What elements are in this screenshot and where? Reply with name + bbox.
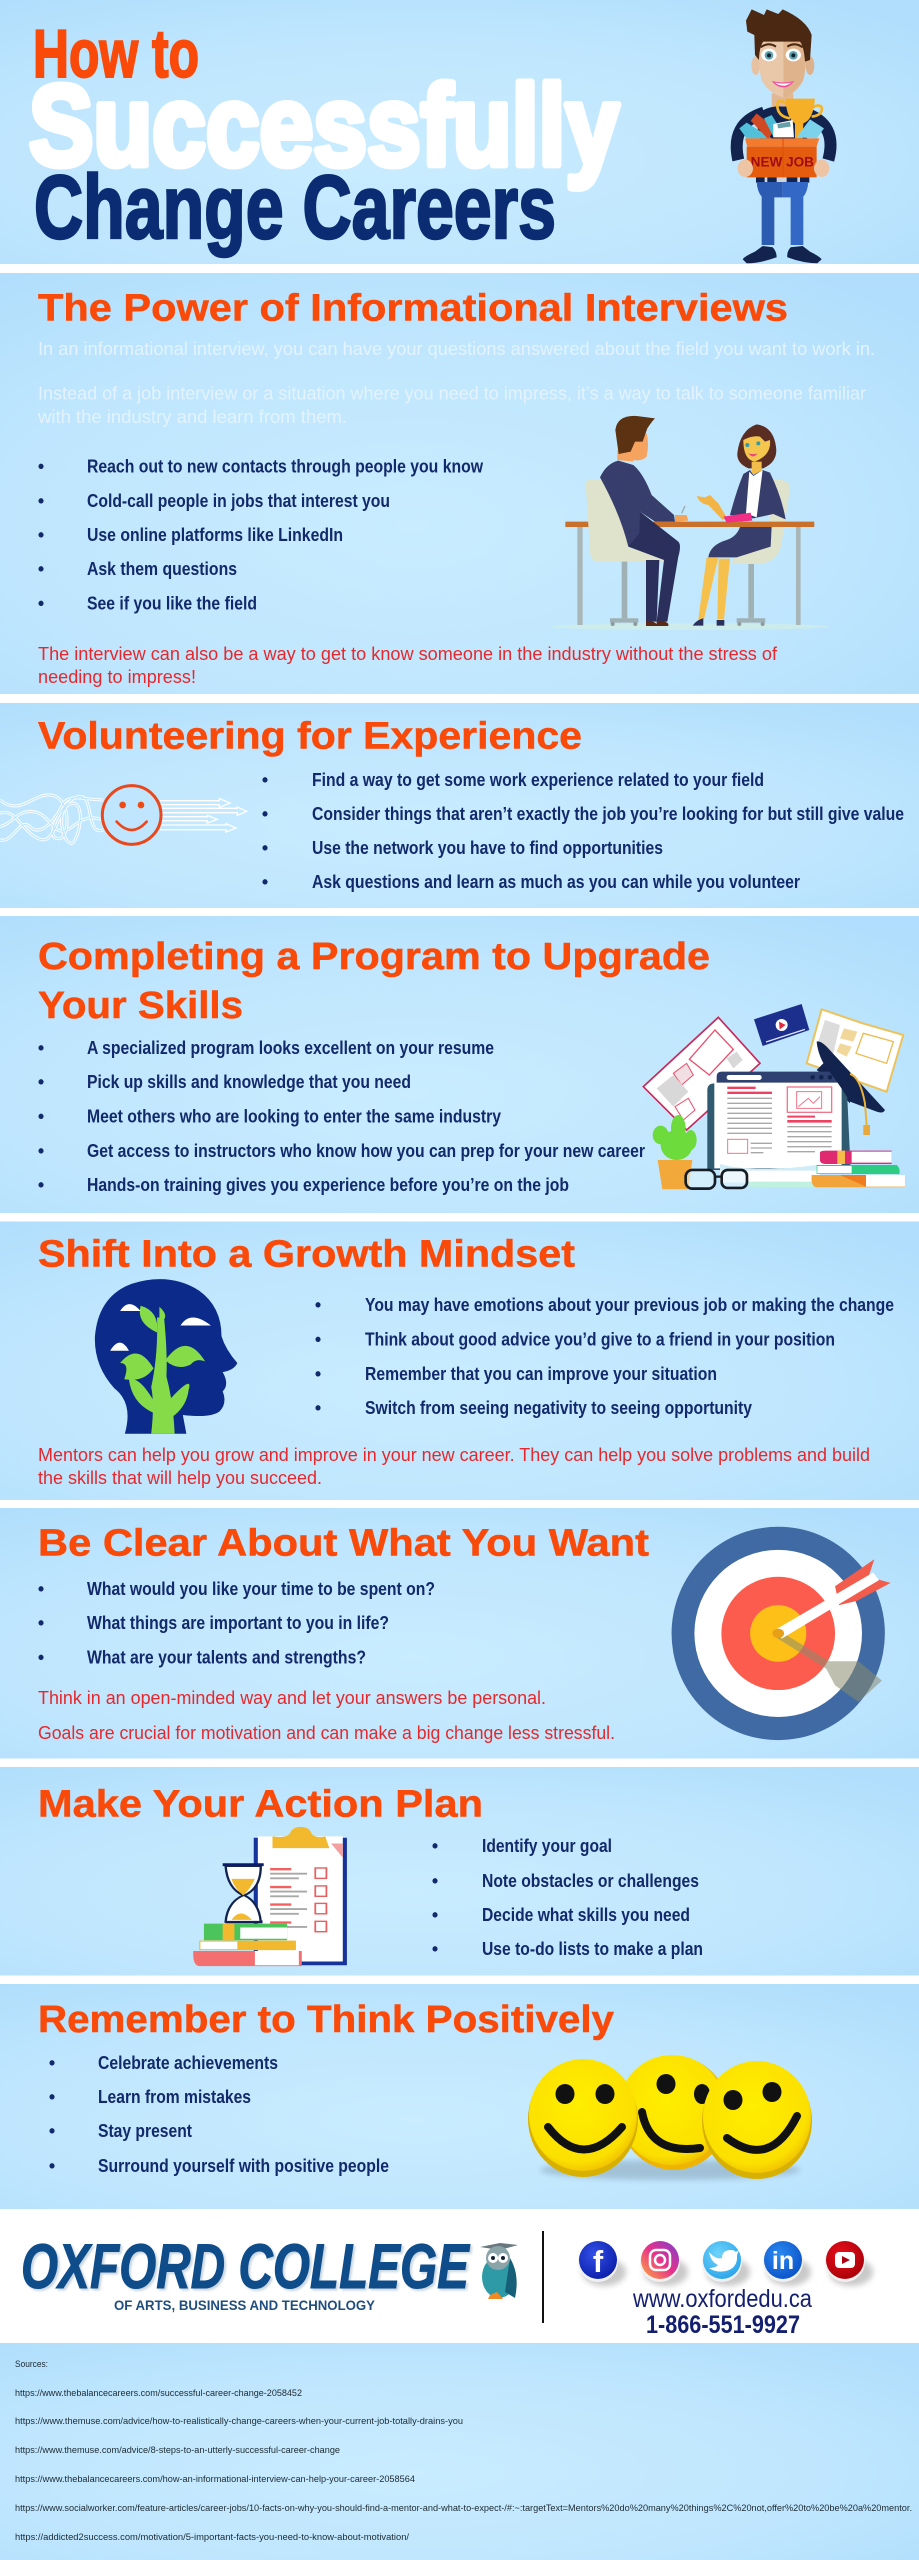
title: Successfully: Successfully [29,63,619,190]
bullet list: • [49,2121,55,2141]
bullet list: Surround yourself with positive people [98,2156,389,2176]
panel: remember to think positively [0,1984,919,2209]
bullet list: Note obstacles or challenges [482,1871,699,1891]
bullet list: • [49,2156,55,2176]
text block: goals note [38,1688,615,1743]
text block: source links: https://www.themuse.com/advice/how-to-realistically-change-careers-when-your-current-job-totally-drains-you [15,2416,463,2427]
icons: social media buttons: f [593,2244,604,2279]
bullet list: See if you like the field [87,594,257,614]
text block: closing note [38,644,778,687]
text block: source links: Sources: [15,2359,48,2370]
heading: The Power of Informational Interviews [38,288,788,330]
bullet list: • [38,491,44,511]
bullet list: • [38,456,44,476]
text block: source links: https://www.themuse.com/advice/8-steps-to-an-utterly-successful-career-change [15,2445,340,2456]
heading: Completing a Program to Upgrade [38,936,710,978]
bullet list: Get access to instructors who know how you can prep for your new career [87,1141,645,1161]
text block: source links: https://www.thebalancecareers.com/how-an-informational-interview-can-help-your-career-2058564 [15,2474,416,2485]
logo: Oxford College wordmark: OF ARTS, BUSINESS AND TECHNOLOGY [114,2297,376,2313]
bullet list: • [432,1905,438,1925]
heading: Remember to Think Positively [38,1999,614,2041]
bullet list: Ask them questions [87,559,237,579]
bullet list: • [38,1175,44,1195]
bullet list: Decide what skills you need [482,1905,690,1925]
bullet list: • [49,2087,55,2107]
heading: Shift Into a Growth Mindset [38,1234,575,1276]
bullet list: Pick up skills and knowledge that you need [87,1072,411,1092]
heading: Be Clear About What You Want [38,1522,649,1564]
text block: mentors note: the skills that will help you succeed. [38,1468,322,1488]
bullet list: Remember that you can improve your situation [365,1364,717,1384]
bullet list: • [38,1106,44,1126]
bullet list [315,1295,894,1418]
bullet list: What would you like your time to be spent on? [87,1579,435,1599]
bullet list: • [38,1579,44,1599]
bullet list [38,1579,435,1668]
panel: header [0,0,919,264]
bullet list [38,1038,645,1195]
icon: owl with graduation cap [480,2243,518,2299]
bullet list: Switch from seeing negativity to seeing opportunity [365,1398,752,1418]
bullet list: • [38,594,44,614]
bullet list: Use to-do lists to make a plan [482,1939,703,1959]
bullet list: Learn from mistakes [98,2087,251,2107]
bullet list [49,2053,389,2176]
text block: intro: In an informational interview, you can have your questions answered about the field you want to work in. [38,339,875,359]
text block: closing note: needing to impress! [38,667,196,687]
bullet list [38,456,484,614]
contact: phone: 1-866-551-9927 [646,2311,800,2339]
bullet list [432,1836,703,1959]
text block: intro: Instead of a job interview or a situation where you need to impress, it’s a way to talk to someone familiar [38,384,866,404]
text block: intro: with the industry and learn from them. [37,407,347,427]
bullet list: Reach out to new contacts through people you know [87,456,484,476]
bullet list: Meet others who are looking to enter the same industry [87,1106,501,1126]
bullet list: Use the network you have to find opportunities [312,838,663,858]
text block: goals note: Think in an open-minded way and let your answers be personal. [38,1688,546,1708]
text block: mentors note [38,1445,870,1488]
text block: closing note: The interview can also be a way to get to know someone in the industry without the stress of [38,644,778,664]
heading: Make Your Action Plan [38,1784,483,1826]
bullet list: • [38,1141,44,1161]
bullet list: Hands-on training gives you experience before you’re on the job [87,1175,569,1195]
bullet list: • [432,1871,438,1891]
bullet list: Use online platforms like LinkedIn [87,525,343,545]
bullet list: • [432,1939,438,1959]
bullet list: • [262,872,268,892]
logo: Oxford College wordmark [21,2232,470,2313]
bullet list: • [262,838,268,858]
contact: website: www.oxfordedu.ca [632,2285,812,2313]
heading [38,936,710,1027]
bullet list: A specialized program looks excellent on your resume [87,1038,494,1058]
bullet list: What are your talents and strengths? [87,1648,366,1668]
bullet list: What things are important to you in life? [87,1613,389,1633]
bullet list: Celebrate achievements [98,2053,278,2073]
bullet list: Find a way to get some work experience related to your field [312,770,764,790]
icon: man holding new job box [737,9,831,263]
text block: source links: https://addicted2success.com/motivation/5-important-facts-you-need-to-know-about-motivation/ [15,2532,409,2543]
panel: sources [0,2343,919,2560]
text block: goals note: Goals are crucial for motivation and can make a big change less stressful. [38,1723,615,1743]
bullet list: Stay present [98,2121,192,2141]
bullet list: Cold-call people in jobs that interest you [87,491,390,511]
panel: be clear about what you want [0,1508,919,1758]
bullet list: Identify your goal [482,1836,612,1856]
bullet list: • [262,804,268,824]
icon: three yellow smileys [528,2055,812,2180]
bullet list: • [38,1072,44,1092]
panel: college footer [0,2209,919,2343]
bullet list: • [315,1364,321,1384]
text block: intro [37,339,875,427]
text block: mentors note: Mentors can help you grow and improve in your new career. They can help you solve problems and build [38,1445,870,1465]
bullet list: • [315,1295,321,1315]
panel: completing a program to upgrade your skills [0,916,919,1213]
bullet list [262,770,904,892]
bullet list: • [38,1613,44,1633]
icon: checklist clipboard with hourglass and books [193,1827,347,1966]
bullet list: • [38,559,44,579]
icons: social media buttons: in [772,2247,794,2275]
logo: Oxford College wordmark: OXFORD COLLEGE [21,2232,470,2302]
bullet list: • [49,2053,55,2073]
panel: the power of informational interviews [0,273,919,694]
icon: target with arrow [672,1527,891,1740]
icon label: NEW JOB: NEW JOB [751,153,814,169]
bullet list: Think about good advice you’d give to a friend in your position [365,1330,835,1350]
panel: shift into a growth mindset [0,1222,919,1500]
bullet list: • [315,1398,321,1418]
panel: volunteering for experience [0,703,919,908]
heading: Volunteering for Experience [38,716,582,758]
bullet list: • [38,525,44,545]
text block: source links [15,2359,912,2543]
icon: head with growing plant [95,1279,237,1434]
icons: social media buttons [578,2241,873,2286]
bullet list: • [432,1836,438,1856]
bullet list: • [38,1038,44,1058]
title: Change Careers: Change Careers [34,158,556,258]
heading: Your Skills [38,985,243,1027]
panel: make your action plan [0,1767,919,1976]
bullet list: Ask questions and learn as much as you can while you volunteer [312,872,800,892]
icon: smiley untangling lines into arrows [0,786,247,844]
bullet list: • [38,1648,44,1668]
illustration: interview at a table [552,416,828,630]
illustration: laptop, books, cap and cactus [643,1004,905,1189]
title: How to: How to [33,16,199,92]
bullet list: • [262,770,268,790]
divider [542,2231,544,2323]
text block: source links: https://www.thebalancecareers.com/successful-career-change-2058452 [15,2388,302,2399]
bullet list: • [315,1330,321,1350]
